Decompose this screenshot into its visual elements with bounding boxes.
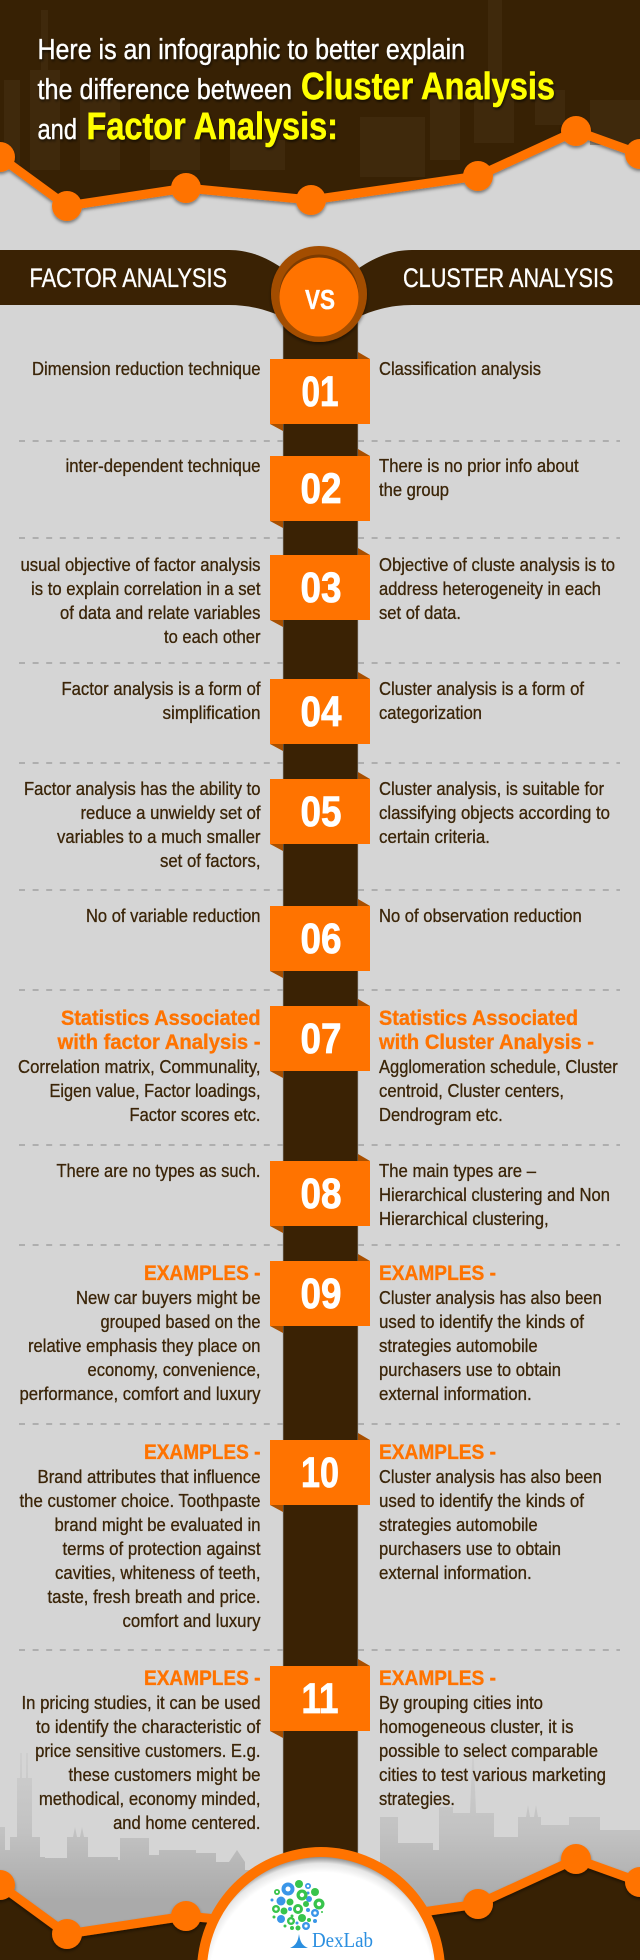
row dividers [19, 441, 620, 1650]
row 03: set of data. [379, 602, 461, 623]
row 03: to each other [164, 626, 260, 647]
heading: and [38, 114, 77, 146]
row 11: to identify the characteristic of [36, 1716, 261, 1737]
row 09: purchasers use to obtain [379, 1359, 561, 1380]
row 11: price sensitive customers. E.g. [35, 1740, 260, 1761]
row 11: strategies. [379, 1788, 455, 1809]
bottom skyline [0, 1737, 640, 1960]
VS badge [271, 246, 367, 342]
row 10: EXAMPLES - [144, 1440, 260, 1464]
row 09 [20, 1254, 602, 1404]
row 09: New car buyers might be [76, 1287, 260, 1308]
row 10: the customer choice. Toothpaste [20, 1490, 260, 1511]
footer arch [198, 1847, 444, 1960]
row 05: set of factors, [160, 850, 260, 871]
row 05: Cluster analysis, is suitable for [379, 778, 604, 799]
row 10: comfort and luxury [122, 1610, 261, 1631]
heading: Here is an infographic to better explain [38, 34, 465, 66]
row 10: Cluster analysis has also been [379, 1466, 602, 1487]
row 03: of data and relate variables [60, 602, 260, 623]
row 04 [62, 672, 585, 751]
row 10: cavities, whiteness of teeth, [55, 1562, 260, 1583]
heading [38, 34, 555, 148]
row 05: 05 [300, 788, 342, 836]
row 05: reduce a unwieldy set of [80, 802, 261, 823]
row 02: inter-dependent technique [66, 455, 260, 476]
row 09: 09 [300, 1270, 342, 1318]
row 09: strategies automobile [379, 1335, 538, 1356]
central spine [283, 300, 358, 1870]
row 04: categorization [379, 702, 482, 723]
row 11: cities to test various marketing [379, 1764, 606, 1785]
row 10: used to identify the kinds of [379, 1490, 585, 1511]
row 06: No of observation reduction [379, 905, 582, 926]
row 07: Agglomeration schedule, Cluster [379, 1056, 618, 1077]
row 07: 07 [300, 1015, 342, 1063]
row 11: possible to select comparable [379, 1740, 598, 1761]
row 05: variables to a much smaller [57, 826, 260, 847]
row 03: address heterogeneity in each [379, 578, 601, 599]
row 05: certain criteria. [379, 826, 490, 847]
row 02: There is no prior info about [379, 455, 579, 476]
row 10 [20, 1433, 602, 1631]
row 01: Dimension reduction technique [32, 358, 260, 379]
row 03: usual objective of factor analysis [20, 554, 260, 575]
row 03 [20, 548, 615, 647]
row 11: and home centered. [113, 1812, 260, 1833]
row 10: brand might be evaluated in [54, 1514, 260, 1535]
row 11: methodical, economy minded, [39, 1788, 260, 1809]
row 09: economy, convenience, [88, 1359, 260, 1380]
comparison header band [0, 250, 640, 318]
row 07: centroid, Cluster centers, [379, 1080, 564, 1101]
row 08: There are no types as such. [56, 1160, 260, 1181]
row 10: purchasers use to obtain [379, 1538, 561, 1559]
heading: the difference between [38, 74, 292, 106]
row 05: Factor analysis has the ability to [24, 778, 260, 799]
row 11: In pricing studies, it can be used [22, 1692, 260, 1713]
row 08: Hierarchical clustering and Non [379, 1184, 610, 1205]
row 07: with factor Analysis - [57, 1030, 260, 1054]
row 01: Classification analysis [379, 358, 541, 379]
row 01 [32, 352, 541, 431]
row 09: EXAMPLES - [144, 1261, 260, 1285]
row 04: Cluster analysis is a form of [379, 678, 585, 699]
row 08 [56, 1154, 610, 1233]
row 09: EXAMPLES - [379, 1261, 496, 1285]
row 09: grouped based on the [100, 1311, 260, 1332]
row 07 [18, 999, 618, 1125]
row 06: 06 [300, 915, 342, 963]
line chart decoration: bottom [0, 1844, 640, 1949]
row 03: is to explain correlation in a set [31, 578, 260, 599]
row 02 [66, 449, 579, 528]
row 10: taste, fresh breath and price. [48, 1586, 260, 1607]
logo wordmark: DexLab [312, 1928, 373, 1952]
row 07: Statistics Associated [61, 1006, 260, 1030]
row 04: Factor analysis is a form of [62, 678, 261, 699]
row 11: these customers might be [68, 1764, 260, 1785]
row 04: simplification [162, 702, 260, 723]
row 11: 11 [302, 1675, 338, 1723]
row 11: EXAMPLES - [144, 1666, 260, 1690]
VS badge: VS [305, 284, 335, 315]
row 06: No of variable reduction [86, 905, 260, 926]
row 05 [24, 772, 610, 871]
row 07: Correlation matrix, Communality, [18, 1056, 260, 1077]
row 02: the group [379, 479, 449, 500]
logo tree [270, 1880, 324, 1948]
row 11 [22, 1659, 606, 1833]
row 08: 08 [300, 1170, 342, 1218]
footer dark area [0, 1859, 640, 1960]
row 10: strategies automobile [379, 1514, 538, 1535]
row 04: 04 [300, 688, 342, 736]
row 11: By grouping cities into [379, 1692, 543, 1713]
comparison header band: FACTOR ANALYSIS [30, 263, 227, 293]
row 10: EXAMPLES - [379, 1440, 496, 1464]
row 09: relative emphasis they place on [28, 1335, 260, 1356]
row 11: homogeneous cluster, it is [379, 1716, 574, 1737]
row 03: 03 [300, 564, 342, 612]
row 07: Dendrogram etc. [379, 1104, 503, 1125]
logo: DexLab [270, 1880, 373, 1952]
row 10: 10 [301, 1449, 339, 1497]
heading: Factor Analysis: [86, 106, 338, 148]
row 09: Cluster analysis has also been [379, 1287, 602, 1308]
row 10: Brand attributes that influence [38, 1466, 260, 1487]
row 07: Statistics Associated [379, 1006, 578, 1030]
header dark area [0, 0, 640, 206]
row 08: The main types are – [379, 1160, 537, 1181]
row 09: used to identify the kinds of [379, 1311, 585, 1332]
row 10: external information. [379, 1562, 532, 1583]
row 11: EXAMPLES - [379, 1666, 496, 1690]
header skyline [4, 0, 640, 177]
row 09: performance, comfort and luxury [20, 1383, 261, 1404]
row 08: Hierarchical clustering, [379, 1208, 549, 1229]
line chart decoration: top [0, 116, 640, 221]
row 06 [86, 899, 582, 978]
row 05: classifying objects according to [379, 802, 610, 823]
row 10: terms of protection against [62, 1538, 260, 1559]
row 09: external information. [379, 1383, 532, 1404]
row 07: Factor scores etc. [130, 1104, 260, 1125]
row 07: Eigen value, Factor loadings, [50, 1080, 260, 1101]
row 01: 01 [302, 368, 338, 416]
row 02: 02 [300, 465, 342, 513]
row 07: with Cluster Analysis - [378, 1030, 594, 1054]
heading: Cluster Analysis [301, 66, 555, 108]
row 03: Objective of cluste analysis is to [379, 554, 615, 575]
